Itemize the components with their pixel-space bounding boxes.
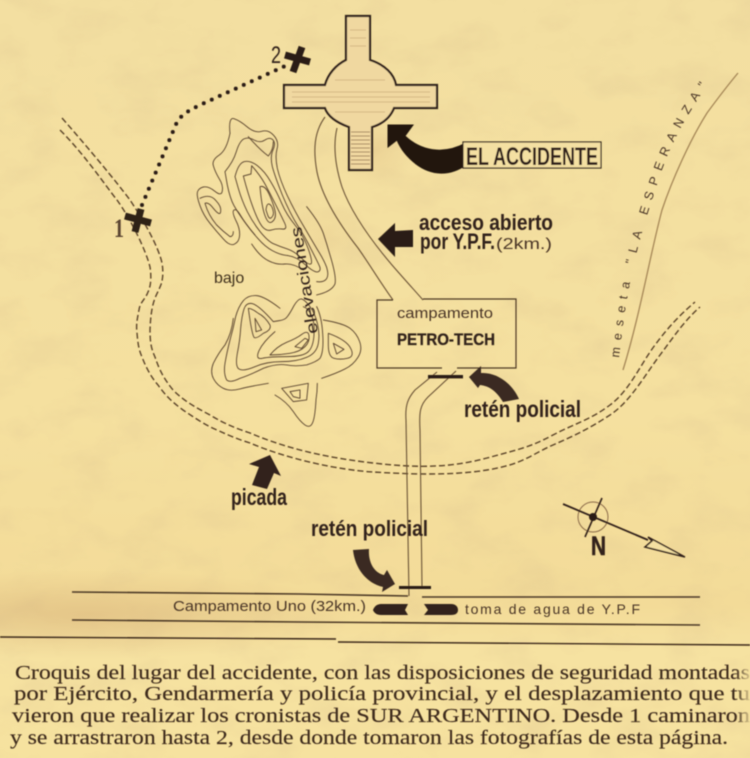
arrow to the accident	[388, 125, 466, 173]
marker 1	[114, 209, 151, 243]
panel: camp Petro-Tech: campamento	[397, 305, 493, 322]
label: Campamento Uno: Campamento Uno (32km.)	[173, 598, 366, 615]
label: elevaciones: elevaciones	[288, 226, 322, 335]
compass north: N	[591, 531, 606, 561]
caption: y se arrastraron hasta 2, desde donde tomaron las fotografías de esta página.	[10, 727, 728, 749]
contour lines: elevations	[197, 118, 361, 426]
roads from the accident site to camp	[315, 117, 423, 300]
label: access road: por Y.P.F.	[420, 229, 495, 254]
dashed trail: picada	[60, 118, 700, 474]
marker 1: 1	[114, 214, 124, 243]
crossroad accident site	[284, 16, 437, 170]
arrow: access road	[378, 223, 413, 257]
dotted route from 1 to 2	[142, 66, 285, 205]
arrow: picada	[249, 455, 281, 489]
label: access road	[419, 210, 553, 254]
label: meseta La Esperanza: meseta "LA ESPERANZA"	[612, 80, 702, 358]
caption	[10, 662, 750, 749]
label: toma de agua: toma de agua de Y.P.F	[465, 601, 640, 617]
label: picada: picada	[231, 484, 287, 510]
label: upper checkpoint: retén policial	[464, 396, 581, 422]
label: El accidente: EL ACCIDENTE	[466, 143, 598, 171]
meseta line	[623, 73, 738, 370]
caption: por Ejército, Gendarmería y policía provincial, y el desplazamiento que tu	[14, 683, 750, 705]
panel: camp Petro-Tech: PETRO-TECH	[397, 330, 495, 349]
label: access road: acceso abierto	[419, 210, 553, 235]
road block: left	[373, 604, 408, 615]
caption: Croquis del lugar del accidente, con las disposiciones de seguridad montadas	[15, 662, 750, 684]
checkpoint bar: upper	[428, 375, 463, 378]
checkpoint bar: lower	[399, 586, 431, 589]
main road	[72, 592, 700, 625]
marker 2: 2	[271, 42, 281, 69]
label: access road: (2km.)	[496, 236, 552, 253]
label: bajo: bajo	[214, 270, 244, 287]
camp road	[406, 371, 456, 596]
marker 2	[271, 42, 310, 72]
divider	[0, 637, 750, 645]
caption: vieron que realizar los cronistas de SUR ARGENTINO. Desde 1 caminaron	[12, 705, 750, 727]
panel: camp Petro-Tech	[377, 299, 516, 368]
label: lower checkpoint: retén policial	[311, 516, 428, 541]
road block: right	[424, 604, 458, 615]
compass north	[563, 498, 685, 561]
arrow: lower checkpoint	[353, 549, 395, 592]
arrow: upper checkpoint	[469, 366, 519, 402]
